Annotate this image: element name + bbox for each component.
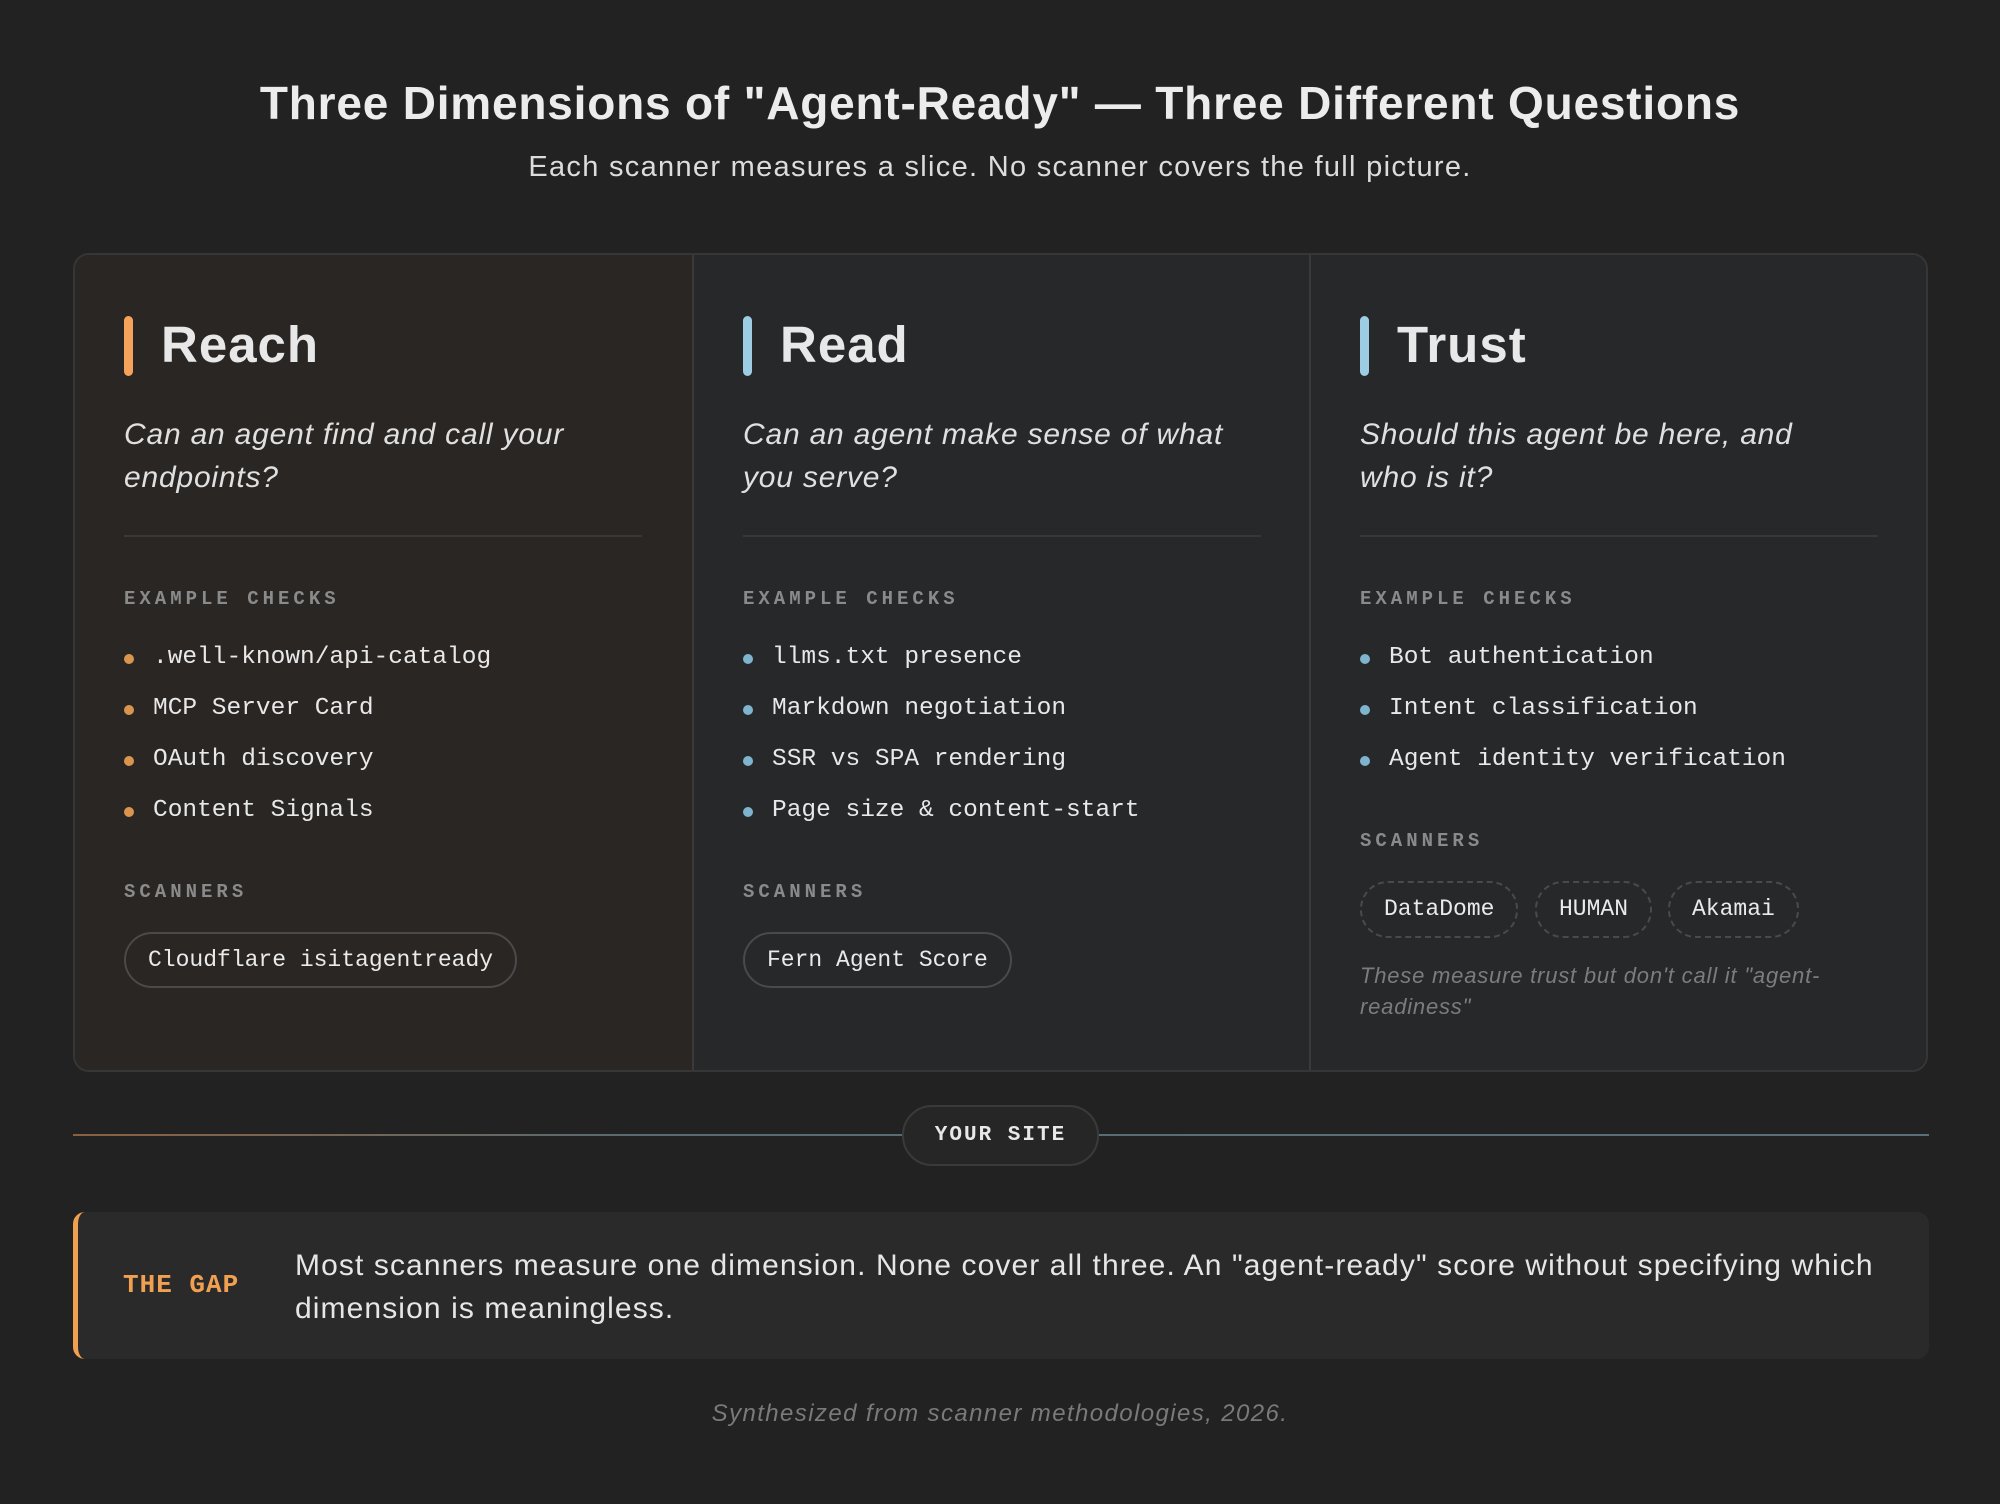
heading: trust: Trust <box>1397 316 1527 373</box>
label: scanners: SCANNERS <box>124 881 247 903</box>
list: reach checks: Content Signals <box>153 797 374 824</box>
your site pill: YOUR SITE <box>935 1124 1066 1147</box>
list: trust checks: Bot authentication <box>1389 644 1654 671</box>
note: These measure trust but don't call it "agent- <box>1360 963 1820 988</box>
icon: orange accent bar <box>124 316 133 376</box>
text: gap <box>295 1249 1874 1325</box>
icon: blue accent bar <box>743 316 752 376</box>
pill: cloudflare: Cloudflare isitagentready <box>148 947 493 973</box>
question: reach <box>124 418 564 494</box>
question: trust: who is it? <box>1360 461 1493 494</box>
list: read checks <box>743 644 1140 824</box>
your site line <box>73 1134 1929 1136</box>
list: read checks: Page size & content-start <box>772 797 1140 824</box>
pills: trust scanners: Akamai <box>1692 896 1775 922</box>
question: read: Can an agent make sense of what <box>743 418 1223 451</box>
list: trust checks <box>1360 644 1786 773</box>
label: scanners: SCANNERS <box>743 881 866 903</box>
pill: fern: Fern Agent Score <box>767 947 988 973</box>
title: Three Dimensions of "Agent-Ready" — Three Different Questions <box>260 77 1740 129</box>
pills: trust scanners <box>1360 881 1799 938</box>
footer: Synthesized from scanner methodologies, 2026. <box>712 1400 1288 1427</box>
heading: reach: Reach <box>161 316 319 373</box>
list: read checks: Markdown negotiation <box>772 695 1066 722</box>
list: reach checks <box>124 644 491 824</box>
label: example checks: EXAMPLE CHECKS <box>124 588 340 610</box>
panel: trust <box>1309 255 1926 1070</box>
label: example checks: EXAMPLE CHECKS <box>743 588 959 610</box>
your site pill <box>902 1105 1099 1166</box>
note <box>1360 963 1820 1019</box>
question: trust: Should this agent be here, and <box>1360 418 1793 451</box>
list: reach checks: OAuth discovery <box>153 746 374 773</box>
label: scanners: SCANNERS <box>1360 830 1483 852</box>
text: gap: Most scanners measure one dimension. None cover all three. An "agent-ready" score without specifying which <box>295 1249 1874 1282</box>
question: read <box>741 418 1224 494</box>
list: trust checks: Agent identity verification <box>1389 746 1786 773</box>
panel: reach <box>75 255 692 1070</box>
list: read checks: SSR vs SPA rendering <box>772 746 1066 773</box>
text: gap: dimension is meaningless. <box>295 1292 674 1325</box>
pills: trust scanners: HUMAN <box>1559 896 1628 922</box>
label: example checks: EXAMPLE CHECKS <box>1360 588 1576 610</box>
list: read checks: llms.txt presence <box>772 644 1022 671</box>
callout: the gap <box>73 1212 1929 1359</box>
list: trust checks: Intent classification <box>1389 695 1698 722</box>
list: reach checks: .well-known/api-catalog <box>153 644 491 671</box>
pill: fern <box>743 932 1012 988</box>
label: the gap: THE GAP <box>123 1270 239 1300</box>
question: trust <box>1360 418 1793 494</box>
heading: read: Read <box>780 316 909 373</box>
panel: three dimensions <box>73 253 1928 1072</box>
list: reach checks: MCP Server Card <box>153 695 374 722</box>
pills: trust scanners: DataDome <box>1384 896 1494 922</box>
question: read: you serve? <box>743 461 898 494</box>
icon: blue accent bar <box>1360 316 1369 376</box>
question: reach: endpoints? <box>124 461 279 494</box>
note: readiness" <box>1360 994 1471 1019</box>
question: reach: Can an agent find and call your <box>124 418 564 451</box>
panel: read <box>692 255 1309 1070</box>
pill: cloudflare <box>124 932 517 988</box>
subtitle: Each scanner measures a slice. No scanner covers the full picture. <box>528 151 1472 183</box>
